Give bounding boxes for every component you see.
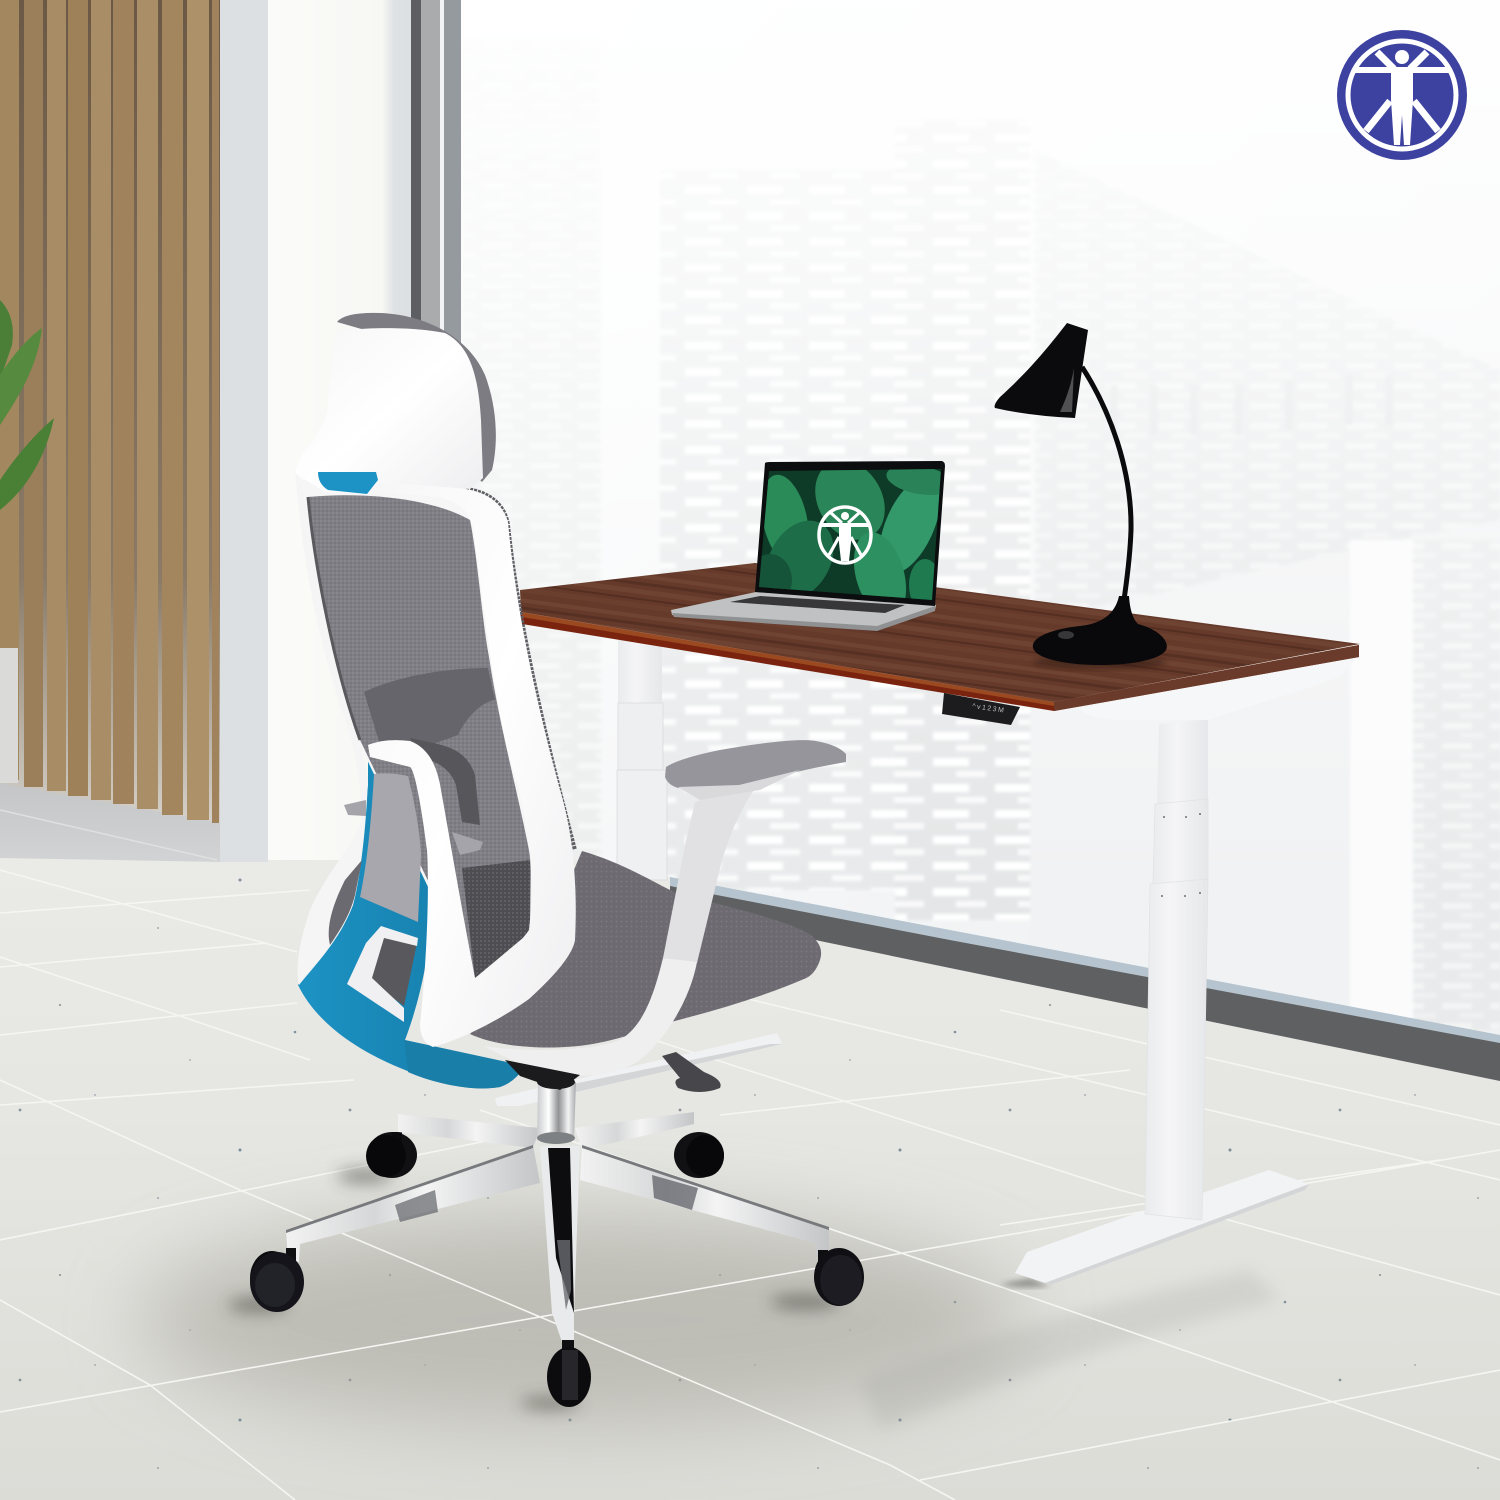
chair base shadow — [228, 1169, 840, 1409]
chair gray lumbar pad — [360, 773, 421, 922]
plant and pot — [0, 300, 54, 783]
lamp head — [995, 323, 1088, 418]
caster: front left — [250, 1248, 304, 1312]
front leg — [540, 1146, 580, 1342]
chair white S-frame — [368, 480, 576, 1047]
floor — [0, 780, 1500, 1500]
standing desk: left leg and foot — [495, 640, 782, 1106]
recline paddle lever — [662, 1052, 721, 1092]
desk bracket — [1080, 655, 1359, 720]
shaded floor beside the wall — [0, 780, 222, 862]
logo limbs — [1366, 52, 1438, 131]
logo head — [1395, 50, 1409, 64]
laptop — [671, 461, 945, 631]
desk lamp — [995, 323, 1167, 669]
window with blurred skyline — [472, 266, 1500, 1035]
headrest white shell — [295, 328, 483, 494]
darker mesh lumbar band — [364, 668, 495, 745]
logo body — [1354, 67, 1450, 145]
chair back white underlay — [300, 480, 530, 985]
chair mesh back — [308, 489, 575, 978]
headrest blue clip — [318, 472, 378, 494]
wall column — [220, 0, 411, 862]
mesh left trim — [308, 497, 360, 740]
lamp base — [1033, 596, 1167, 665]
chair lower inner mesh window — [347, 926, 418, 1022]
chair outer left frame — [295, 470, 368, 985]
lamp arm — [1082, 367, 1131, 600]
caster: front right — [814, 1248, 864, 1306]
armrest post and support — [483, 790, 754, 1076]
caster: front — [547, 1340, 591, 1407]
armrest pad — [665, 740, 846, 800]
caster: rear right — [674, 1132, 724, 1178]
headrest gray cushion — [337, 313, 496, 482]
darker lower mesh — [462, 860, 530, 978]
standing desk: right leg and foot — [1000, 719, 1309, 1288]
lumbar support bracket — [344, 738, 483, 855]
mesh edge trim — [466, 489, 575, 850]
chair five-star aluminium base — [286, 1075, 829, 1342]
desk top — [520, 563, 1360, 711]
front right leg — [580, 1145, 829, 1255]
chair blue shell — [298, 758, 525, 1088]
piston — [537, 1082, 576, 1140]
wood slat wall — [0, 0, 220, 823]
chair seat — [470, 851, 821, 1047]
brand logo badge — [1337, 30, 1467, 160]
laptop logo — [819, 507, 871, 563]
laptop screen — [755, 461, 945, 606]
caster: rear left — [366, 1132, 417, 1178]
desk control panel: ^v123M — [972, 703, 1006, 715]
lamp head highlight — [1060, 368, 1074, 412]
under-seat mechanism — [505, 1060, 580, 1090]
front left leg — [286, 1145, 540, 1262]
window frame mullion — [411, 0, 461, 860]
window sill — [670, 877, 1500, 1081]
rear legs — [398, 1114, 540, 1148]
lamp button — [1058, 631, 1074, 639]
desk control panel — [942, 693, 1020, 725]
